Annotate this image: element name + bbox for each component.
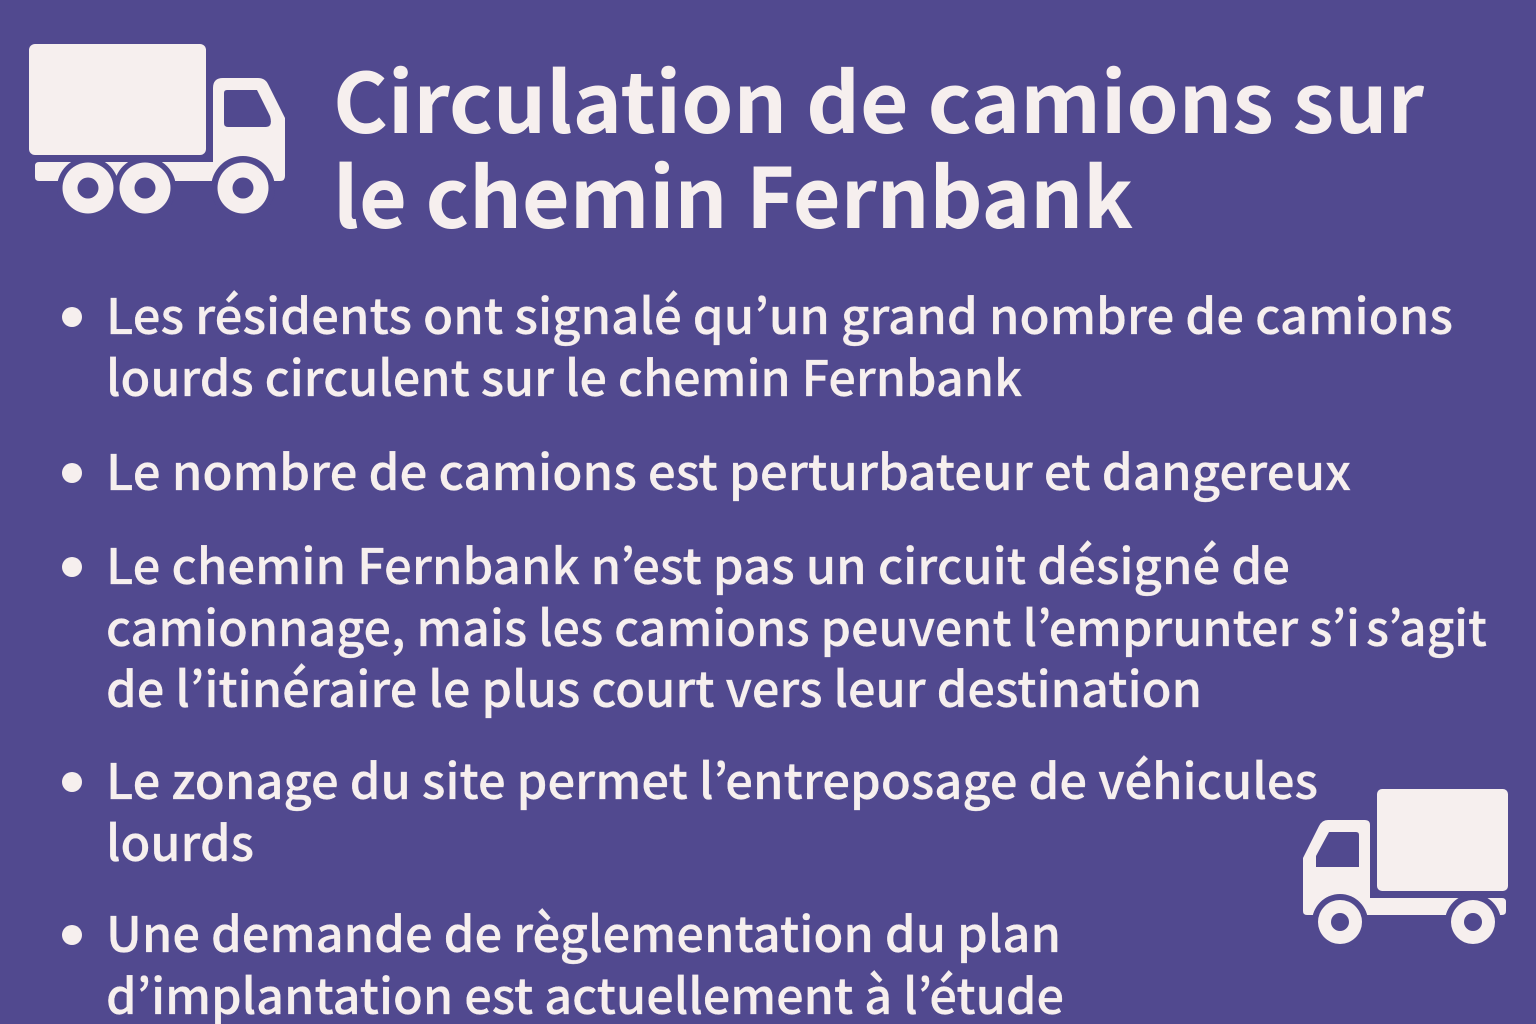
bullet: not a designated truck route: camionnage, mais les camions peuvent l’emprunter s’i bbox=[106, 590, 1360, 661]
bullet: not a designated truck route: Le chemin Fernbank n’est pas un circuit désigné de bbox=[106, 528, 1290, 599]
bullet: site zoning bbox=[62, 743, 1318, 876]
bullet: not a designated truck route bbox=[62, 528, 1487, 722]
bullet: site plan application bbox=[62, 896, 1064, 1024]
title: le chemin Fernbank bbox=[333, 132, 1133, 252]
icon: truck top left bbox=[29, 44, 285, 225]
bullet: residents report trucks bbox=[62, 278, 1453, 411]
bullet: site zoning: Le zonage du site permet l’entreposage de véhicules bbox=[106, 743, 1318, 814]
bullet: not a designated truck route: de l’itinéraire le plus court vers leur destination bbox=[106, 651, 1202, 722]
title: Circulation de camions sur bbox=[333, 37, 1425, 157]
bullet: site plan application: Une demande de règlementation du plan bbox=[106, 896, 1061, 967]
bullet: residents report trucks: Les résidents ont signalé qu’un grand nombre de camions bbox=[106, 278, 1453, 349]
bullet: not a designated truck route: s’agit bbox=[1366, 590, 1487, 661]
bullet: disruptive and dangerous: Le nombre de camions est perturbateur et dangereux bbox=[106, 434, 1351, 505]
title bbox=[333, 37, 1425, 252]
bullet: residents report trucks: lourds circulent sur le chemin Fernbank bbox=[106, 340, 1022, 411]
icon: truck bottom right bbox=[1295, 789, 1515, 950]
bullet: site zoning: lourds bbox=[106, 805, 254, 876]
